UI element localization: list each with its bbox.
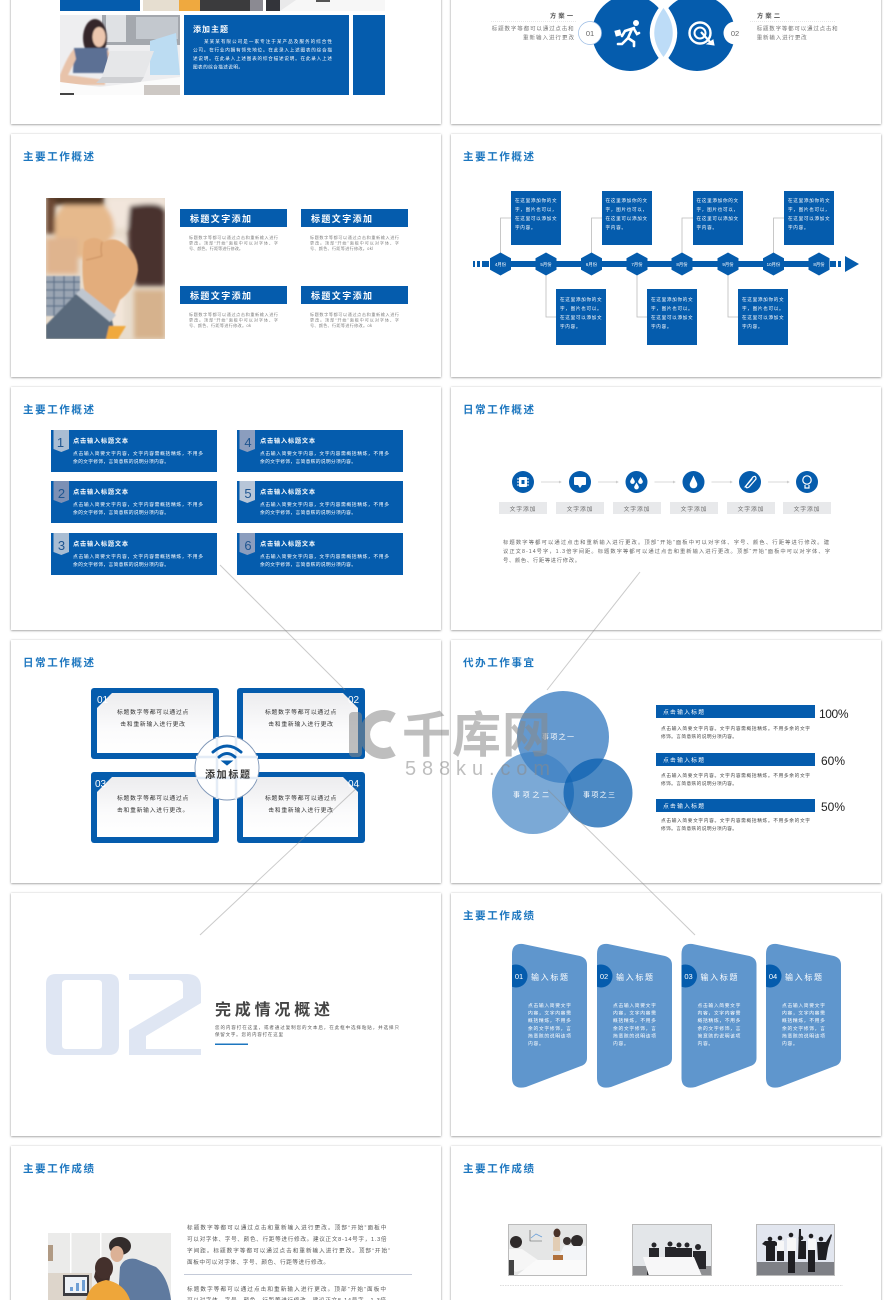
block body text: 公司。在行业内拥有领先地位。在此录入上述图表的综合描	[193, 46, 332, 54]
item 6	[237, 533, 403, 575]
label chip 4	[670, 502, 718, 514]
hexagon 5月份: 5月份	[540, 261, 552, 268]
result card 01: 概括精炼，不用多	[528, 1017, 572, 1024]
result card 04: 余的文字修饰，言	[782, 1025, 826, 1032]
results text block 1	[187, 1224, 390, 1266]
upper note 2: 在这里可以添加文	[606, 215, 648, 222]
upper note 1: 在这里添加你的文	[515, 197, 557, 204]
icon: wifi	[213, 746, 241, 765]
icon: single drop	[682, 471, 704, 493]
label chip 2: 文字添加	[567, 505, 593, 513]
caption 1	[189, 234, 278, 251]
upper note 2: 字，图片也可以，	[606, 206, 648, 213]
upper note 1: 在这里可以添加文	[515, 215, 557, 222]
hexagon 10月份	[763, 252, 784, 276]
result card 01: 简意赅的说明该项	[528, 1032, 572, 1040]
hexagon 7月份: 7月份	[631, 261, 643, 268]
label chip 6	[783, 502, 831, 514]
result card 04: 04	[769, 972, 777, 981]
results text block 1: 标题数字等都可以通过点击和重新输入进行更改。顶部“开始”面板中	[187, 1224, 387, 1232]
timeline bar and arrow	[473, 256, 859, 272]
big numeral 02	[46, 974, 201, 1055]
icon: target with arrow	[690, 22, 714, 45]
label chip 3	[613, 502, 661, 514]
caption 2: 标题数字等都可以通过点击和重新输入进行	[310, 234, 399, 240]
caption 3: 号、颜色、行距等进行修改。ok	[189, 322, 252, 328]
item 4: 余的文字修饰，言简意赅的说明分项内容。	[260, 458, 356, 465]
title bar 4: 标题文字添加	[311, 290, 373, 301]
label chip 4: 文字添加	[681, 505, 707, 513]
card 03: 击和重新输入进行更改。	[117, 806, 189, 814]
card 04: 击和重新输入进行更改	[268, 806, 334, 814]
hexagon 9月份: 9月份	[722, 261, 734, 268]
plan one text: 方案一	[550, 12, 573, 20]
results text block 2: 标题数字等都可以通过点击和重新输入进行更改。顶部“开始”面板中	[187, 1285, 386, 1293]
card 03: 标题数字等都可以通过点	[117, 794, 189, 802]
hexagon 6月份: 6月份	[586, 261, 598, 268]
progress row 60%	[656, 753, 845, 787]
caption 1: 标题数字等都可以通过点击和重新输入进行	[189, 234, 278, 240]
progress row 60%: 修饰。言简意赅的说明分项内容。	[661, 780, 737, 787]
lower note 1: 字内容。	[560, 323, 581, 330]
item 5: 点击输入标题文本	[260, 488, 316, 496]
result card 01	[512, 944, 587, 1088]
item 3	[51, 533, 217, 575]
description paragraph	[503, 538, 830, 564]
upper note 1: 字，图片也可以，	[515, 206, 557, 213]
progress row 100%: 100%	[819, 707, 849, 721]
lower note 2: 在这里可以添加文	[651, 314, 693, 321]
card 04	[237, 772, 365, 843]
progress row 100%: 修饰。言简意赅的说明分项内容。	[661, 733, 737, 740]
lower note 3	[738, 289, 788, 345]
title bar 2	[301, 209, 408, 227]
result card 02: 简意赅的说明该项	[613, 1032, 657, 1040]
top photo: desk with orange item	[143, 0, 263, 11]
progress row 100%: 点击输入标题	[663, 708, 704, 716]
heading: 日常工作概述	[23, 656, 96, 669]
hexagon 6月份	[581, 252, 602, 276]
progress row 60%: 点击输入标题	[663, 756, 704, 764]
hexagon 9月份	[718, 252, 738, 276]
heading: 主要工作成绩	[463, 909, 536, 922]
number badge 01: 01	[586, 29, 594, 38]
heading: 主要工作成绩	[463, 1162, 536, 1175]
heading: 主要工作概述	[23, 150, 96, 163]
lower note 2: 在这里添加你的文	[651, 296, 693, 303]
lower note 1	[556, 289, 606, 345]
item 2: 2	[58, 486, 65, 501]
icon: speech bubble	[569, 471, 591, 493]
panel: daily work four cards	[11, 640, 441, 883]
result card 02: 内容。	[613, 1040, 629, 1047]
item 1: 余的文字修饰，言简意赅的说明分项内容。	[73, 458, 169, 465]
caption 2: 号、颜色、行距等进行修改。okl	[310, 245, 373, 251]
result card 03: 概括精炼，不用多	[698, 1017, 741, 1024]
photo: team around a table	[632, 1224, 712, 1276]
icon: running man	[614, 20, 639, 46]
label chip 3: 文字添加	[624, 505, 650, 513]
panel: two plans slide	[451, 0, 881, 124]
result card 03	[682, 944, 756, 1088]
plan one text: 重新输入进行更改	[523, 34, 574, 42]
progress row 50%: 点击输入标题	[663, 802, 704, 810]
number badge 01	[578, 22, 602, 44]
results text block 1: 字间距。标题数字等都可以通过点击和重新输入进行更改。顶部“开始”	[187, 1246, 390, 1254]
section title: 完成情况概述	[215, 1000, 330, 1019]
item 5: 点击输入简要文字内容，文字内容需概括精炼，不用多	[260, 501, 389, 508]
description paragraph: 议正文8-14号字，1.3倍字间距。标题数字等都可以通过点击和重新输入进行更改。顶部“开始”面板中可以对字体、字	[503, 547, 830, 555]
icon: water drops	[626, 471, 648, 493]
heading: 日常工作概述	[463, 403, 536, 416]
caption 2: 更改。顶部“开始”面板中可以对字体、字	[310, 240, 399, 246]
result card 04: 输入标题	[785, 972, 822, 982]
hexagon 10月份: 10月份	[767, 261, 781, 268]
panel: four work results	[451, 893, 881, 1136]
progress row 100%: 点击输入简要文字内容。文字内容需概括精炼。不用多余的文字	[661, 725, 810, 732]
card 03: 03	[95, 779, 107, 790]
item 1: 1	[57, 435, 64, 450]
plan two text: 重新输入进行更改	[757, 34, 807, 42]
label chip 1: 文字添加	[510, 505, 536, 513]
lower note 2: 字，图片也可以。	[651, 305, 693, 312]
caption 4: 标题数字等都可以通过点击和重新输入进行	[310, 311, 399, 317]
result card 04: 简意赅的说明该项	[782, 1032, 826, 1040]
caption 4: 更改。顶部“开始”面板中可以对字体、字	[310, 316, 399, 322]
lower note 3: 字内容。	[742, 323, 763, 330]
upper note 3: 在这里可以添加文	[696, 215, 739, 222]
upper note 2: 在这里添加你的文	[606, 197, 648, 204]
panel: daily work icon process	[451, 387, 881, 630]
plan one text: 标题数字等都可以通过点击和	[492, 24, 574, 32]
progress row 50%: 50%	[821, 800, 845, 814]
heading: 主要工作概述	[23, 403, 96, 416]
lower note 2	[647, 289, 697, 345]
lower note 1: 在这里可以添加文	[560, 314, 602, 321]
panel: main work overview with photo	[11, 134, 441, 377]
card 02	[237, 688, 365, 759]
result card 02: 内容，文字内容需	[613, 1010, 657, 1016]
description paragraph: 号、颜色、行距等进行修改。	[503, 556, 580, 564]
blue text block	[184, 15, 349, 95]
item 6: 点击输入简要文字内容，文字内容需概括精炼，不用多	[260, 553, 389, 560]
result card 02: 点击输入简要文字	[613, 1002, 657, 1009]
lower note 3: 在这里可以添加文	[742, 314, 784, 321]
hexagon 8月份: 8月份	[676, 261, 688, 268]
item 4: 点击输入简要文字内容，文字内容需概括精炼，不用多	[260, 450, 389, 457]
label chip 5: 文字添加	[738, 505, 764, 513]
section subtitle	[215, 1024, 400, 1038]
item 2	[51, 481, 217, 523]
result card 01: 输入标题	[531, 972, 568, 982]
item 3: 点击输入简要文字内容，文字内容需概括精炼，不用多	[73, 553, 203, 560]
number badge 02: 02	[731, 29, 739, 38]
left blue circle	[592, 0, 668, 71]
caption 3: 标题数字等都可以通过点击和重新输入进行	[189, 311, 278, 317]
result card 02: 余的文字修饰，言	[613, 1025, 657, 1032]
icon: light bulb	[796, 471, 818, 493]
result card 03: 简意赅的说明该项	[698, 1032, 741, 1040]
upper note 2	[602, 191, 652, 245]
result card 04: 点击输入简要文字	[782, 1002, 826, 1009]
dotted divider	[500, 1284, 843, 1286]
center badge	[195, 736, 259, 800]
result card 01: 01	[515, 972, 523, 981]
title bar 1: 标题文字添加	[190, 213, 252, 224]
label chip 5	[727, 502, 775, 514]
progress row 100%	[656, 705, 849, 740]
result card 02: 概括精炼，不用多	[613, 1017, 657, 1024]
progress row 50%: 修饰。言简意赅的说明分项内容。	[661, 825, 737, 832]
panel: section 02 divider	[11, 893, 441, 1136]
block body text: 某某某有限公司是一家专注于某产品及服务的综合性	[204, 38, 332, 45]
right blue circle	[659, 0, 735, 71]
center badge: 添加标题	[205, 768, 250, 781]
caption 1: 更改。顶部“开始”面板中可以对字体、字	[189, 240, 278, 246]
progress row 50%: 点击输入简要文字内容。文字内容需概括精炼。不用多余的文字	[661, 817, 810, 824]
upper note 3: 字，图片也可以，	[696, 206, 739, 213]
icon: paperclip	[739, 471, 761, 493]
title bar 3: 标题文字添加	[190, 290, 252, 301]
venn diagram: 事项之三	[583, 790, 615, 799]
results text block 1: 可以对字体、字号、颜色、行距等进行修改。建议正文8-14号字，1.3倍	[187, 1235, 387, 1243]
upper note 3	[693, 191, 743, 245]
caption 3: 更改。顶部“开始”面板中可以对字体、字	[189, 316, 278, 322]
caption 4	[310, 311, 399, 328]
process arrows	[541, 481, 789, 483]
caption 4: 号、颜色、行距等进行修改。ok	[310, 322, 373, 328]
item 6: 6	[244, 538, 252, 553]
card 02: 击和重新输入进行更改	[268, 720, 334, 728]
card 01: 标题数字等都可以通过点	[117, 708, 189, 716]
upper note 4: 在这里添加你的文	[788, 197, 830, 204]
number badge 02	[724, 22, 746, 44]
item 5	[237, 481, 403, 523]
upper note 2: 字内容。	[606, 224, 627, 231]
title bar 4	[301, 286, 408, 304]
result card 03: 余的文字修饰，言	[698, 1025, 741, 1032]
result card 01: 点击输入简要文字	[528, 1002, 572, 1009]
results text block 2	[187, 1285, 386, 1300]
card 02: 02	[348, 695, 360, 706]
item 6: 点击输入标题文本	[260, 540, 316, 548]
panel: work results with photo	[11, 1146, 441, 1300]
hexagon 4月份: 4月份	[495, 261, 507, 268]
description paragraph: 标题数字等都可以通过点击和重新输入进行更改。顶部“开始”面板中可以对字体、字号、颜色、行距等进行修改。建	[503, 538, 830, 546]
result card 02: 输入标题	[616, 972, 653, 982]
lower note 1: 字，图片也可以。	[560, 305, 602, 312]
progress row 60%: 点击输入简要文字内容。文字内容需概括精炼。不用多余的文字	[661, 772, 810, 779]
hexagon last month: 8月份	[813, 261, 825, 268]
section subtitle: 您的内容打在这里，或者通过复制您的文本后，在此框中选择粘贴，并选择只	[215, 1024, 400, 1031]
card 01: 击和重新输入进行更改	[120, 720, 186, 728]
result card 04: 概括精炼，不用多	[782, 1017, 826, 1024]
upper note 4: 字内容。	[788, 224, 809, 231]
narrow blue block	[353, 15, 385, 95]
hexagon 4月份	[490, 252, 511, 276]
upper note 4: 在这里可以添加文	[788, 215, 830, 222]
results text block 1: 面板中可以对字体、字号、颜色、行距等进行修改。	[187, 1258, 329, 1266]
venn diagram	[492, 691, 632, 834]
accent line	[215, 1044, 248, 1045]
block body text	[193, 38, 332, 70]
icon: chip	[512, 471, 534, 493]
progress row 60%: 60%	[821, 754, 845, 768]
center lens	[650, 2, 677, 64]
top photo: white desk	[266, 0, 330, 11]
upper note 1: 字内容。	[515, 224, 536, 231]
card 03	[91, 772, 219, 843]
panel: six numbered items	[11, 387, 441, 630]
lower note 1: 在这里添加你的文	[560, 296, 602, 303]
panel: work results photos	[451, 1146, 881, 1300]
upper note 1	[511, 191, 561, 245]
card 04: 标题数字等都可以通过点	[265, 794, 337, 802]
heading: 代办工作事宜	[463, 656, 536, 669]
result card 02: 02	[600, 972, 608, 981]
item 5: 5	[244, 486, 252, 501]
watermark: 千库网 588ku.com	[200, 565, 695, 935]
item 3: 3	[58, 538, 65, 553]
item 6: 余的文字修饰，言简意赅的说明分项内容。	[260, 561, 356, 568]
item 4	[237, 430, 403, 472]
result card 04: 内容。	[782, 1040, 798, 1047]
block heading: 添加主题	[193, 24, 229, 34]
panel: company intro slide	[11, 0, 441, 124]
upper note 3: 在这里添加你的文	[696, 197, 739, 204]
item 5: 余的文字修饰，言简意赅的说明分项内容。	[260, 509, 356, 516]
photo: cheering team	[756, 1224, 835, 1276]
upper note 4: 字，图片也可以，	[788, 206, 830, 213]
divider	[184, 1273, 412, 1276]
section subtitle: 保留文字。您的内容打在这里	[215, 1031, 284, 1038]
connectors	[500, 218, 784, 317]
item 3: 点击输入标题文本	[73, 540, 129, 548]
item 4: 点击输入标题文本	[260, 437, 316, 445]
watermark: 千库网 588ku.com: 588ku.com	[405, 758, 550, 780]
title bar 1	[180, 209, 287, 227]
photo: meeting presentation	[508, 1224, 587, 1276]
lower note 3: 在这里添加你的文	[742, 296, 784, 303]
panel: monthly timeline	[451, 134, 881, 377]
caption 2	[310, 234, 399, 251]
plan two text: 方案二	[757, 12, 780, 20]
watermark: 千库网 588ku.com: 千库网	[402, 709, 552, 763]
item 2: 余的文字修饰，言简意赅的说明分项内容。	[73, 509, 169, 516]
result card 01: 内容，文字内容需	[528, 1010, 572, 1016]
photo: woman at laptop	[60, 15, 180, 95]
hexagon last month	[808, 252, 830, 276]
upper note 3: 字内容。	[696, 224, 718, 231]
label chip 1	[499, 502, 547, 514]
item 2: 点击输入简要文字内容，文字内容需概括精炼，不用多	[73, 501, 203, 508]
title bar 3	[180, 286, 287, 304]
result card 03: 内容。	[698, 1040, 714, 1047]
plan two text	[750, 12, 838, 42]
card 02: 标题数字等都可以通过点	[265, 708, 337, 716]
photo: two colleagues at a computer	[48, 1233, 171, 1300]
item 1: 点击输入简要文字内容，文字内容需概括精炼，不用多	[73, 450, 203, 457]
hexagon 7月份	[626, 252, 648, 276]
result card 03: 03	[684, 972, 693, 981]
plan one text	[491, 12, 576, 42]
result card 01: 余的文字修饰，言	[528, 1025, 572, 1032]
label chip 6: 文字添加	[794, 505, 820, 513]
result card 04: 内容，文字内容需	[782, 1010, 826, 1016]
heading: 主要工作成绩	[23, 1162, 96, 1175]
lower note 2: 字内容。	[651, 323, 672, 330]
block body text: 图表的综合描述说明。	[193, 64, 243, 70]
label chip 2	[556, 502, 604, 514]
item 4: 4	[244, 435, 252, 450]
item 1	[51, 430, 217, 472]
result card 01: 内容。	[528, 1040, 544, 1047]
caption 3	[189, 311, 278, 328]
hexagon 8月份	[672, 252, 692, 276]
result card 03: 输入标题	[700, 972, 738, 982]
caption 1: 号、颜色、行距等进行修改。	[189, 245, 243, 251]
lower note 3: 字，图片也可以。	[742, 305, 784, 312]
item 1: 点击输入标题文本	[73, 437, 129, 445]
item 3: 余的文字修饰，言简意赅的说明分项内容。	[73, 561, 169, 568]
progress row 50%	[656, 799, 845, 832]
plan two text: 标题数字等都可以通过点击和	[757, 24, 838, 32]
card 01: 01	[97, 695, 109, 706]
card 01	[91, 688, 219, 759]
block body text: 述说明。在此录入上述图表的综合描述说明。在此录入上述	[193, 55, 332, 62]
panel: todo items venn	[451, 640, 881, 883]
photo: raised fist	[46, 198, 165, 339]
hexagon 5月份	[536, 252, 556, 276]
upper note 4	[784, 191, 834, 245]
heading: 主要工作概述	[463, 150, 536, 163]
title bar 2: 标题文字添加	[311, 213, 373, 224]
result card 03: 点击输入简要文字	[698, 1002, 741, 1009]
venn diagram: 事项之二	[513, 790, 549, 799]
card 04: 04	[348, 779, 360, 790]
item 2: 点击输入标题文本	[73, 488, 129, 496]
result card 04	[766, 944, 841, 1088]
top blue block	[60, 0, 140, 11]
result card 03: 内容，文字内容需	[698, 1010, 741, 1016]
venn diagram: 事项之一	[542, 732, 574, 741]
result card 02	[597, 944, 672, 1088]
